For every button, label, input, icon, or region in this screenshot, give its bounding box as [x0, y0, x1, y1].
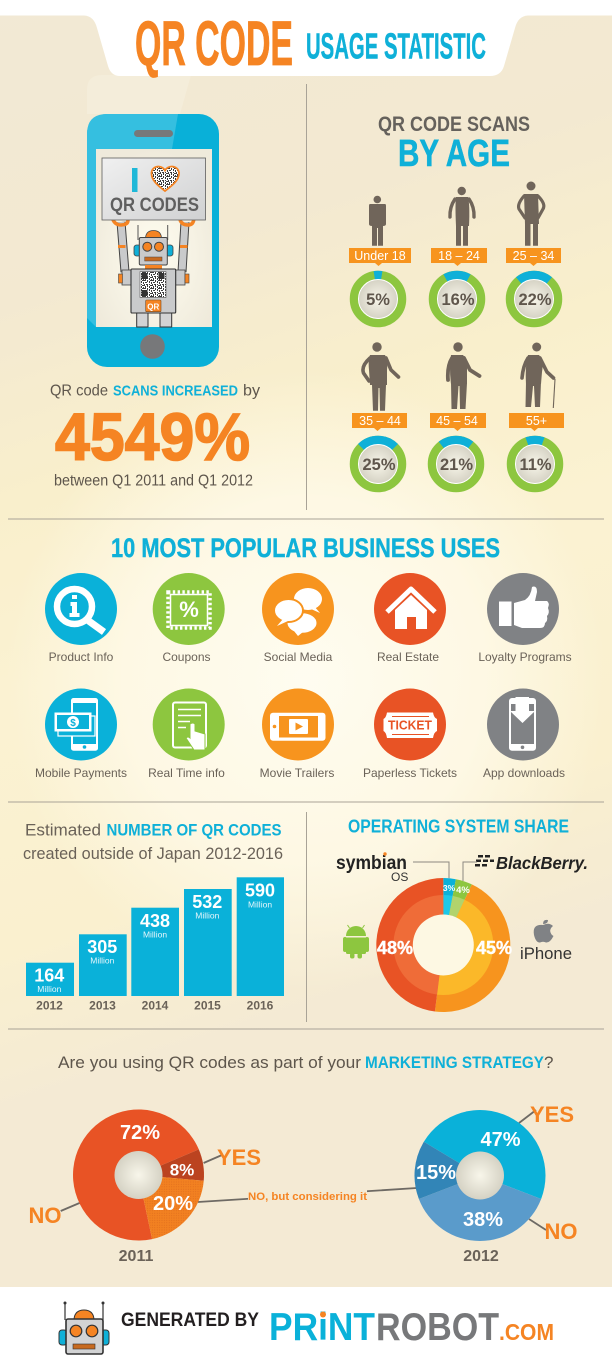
chart heading: number of QR codes: NUMBER OF QR CODES [106, 822, 282, 840]
icon: real estate: Real Estate [377, 650, 439, 664]
age label: under 18: Under 18 [354, 249, 406, 263]
segment: symbian 3% [443, 878, 456, 945]
icon: loyalty programs: Loyalty Programs [478, 650, 572, 664]
logo: symbian: symbian [336, 853, 407, 874]
stat period: between Q1 2011 and Q1 2012 [54, 472, 253, 490]
bar: 2012: Million [37, 984, 62, 994]
person: under 18 [369, 196, 386, 246]
hub [114, 1151, 162, 1199]
slice: considering 15% [414, 1142, 480, 1199]
value: 45%: 45% [476, 938, 512, 958]
callout: yes and no labels: YES [530, 1102, 574, 1127]
person: 55 plus with cane [522, 342, 555, 408]
robot arms [112, 217, 194, 285]
value: 4%: 4% [456, 885, 470, 896]
pie chart: 2012: 2012 [463, 1248, 499, 1265]
icon: loyalty programs [478, 573, 572, 664]
segment: android 48% [376, 878, 443, 1011]
phone body [87, 114, 219, 367]
pie chart: 2012: 47% [480, 1129, 521, 1151]
callout: yes and no labels [28, 1102, 578, 1244]
donut: 11% [511, 440, 559, 488]
icon: paperless tickets [363, 688, 457, 780]
icon: app downloads [483, 688, 565, 780]
robot: QR [147, 302, 160, 311]
bar: 2015: 2015 [194, 998, 221, 1012]
phone home button [140, 334, 165, 359]
bar: 2015: Million [195, 911, 220, 921]
logo: android [343, 925, 369, 958]
logo: printrobot.com: .COM [499, 1319, 554, 1345]
logo: printrobot.com: ROBOT [376, 1306, 499, 1349]
pie chart: 2011: 8% [170, 1160, 194, 1180]
bar: 2013 [79, 934, 127, 1012]
icon: real time info [148, 688, 225, 780]
slice: no 72% [73, 1109, 199, 1240]
age label: 18 to 24 [431, 248, 487, 266]
bar: 2013: 2013 [89, 998, 116, 1012]
protest sign [102, 158, 206, 220]
pie chart: 2011: 20% [153, 1193, 193, 1215]
icon: paperless tickets: TICKET [388, 718, 432, 732]
heading: scans by age: QR CODE SCANS [378, 112, 530, 136]
age label: 55 plus [509, 413, 564, 431]
icon: coupons: Coupons [162, 650, 211, 664]
bar: 2016: 2016 [247, 998, 274, 1012]
bar: 2015 [184, 889, 232, 1012]
callout: yes and no labels: YES [217, 1145, 261, 1170]
icon: mobile payments: Mobile Payments [35, 766, 127, 780]
age label: 25 to 34 [506, 248, 561, 266]
logo: printrobot.com: PRiNT [269, 1306, 375, 1349]
icon: product info [45, 573, 117, 664]
stat lead text: QR code [50, 382, 108, 400]
phone speaker [134, 130, 173, 137]
donut: 21%: 21% [440, 456, 473, 474]
donut: 11%: 11% [519, 456, 552, 474]
logo: apple iphone: iPhone [520, 944, 572, 963]
icon: real estate [374, 573, 446, 664]
logo: blackberry [463, 853, 588, 881]
stat lead text: by [243, 382, 260, 400]
connector lines [61, 1110, 546, 1230]
age label: under 18 [349, 248, 411, 266]
heading: operating system share: OPERATING SYSTEM SHARE [348, 816, 569, 836]
age label: 35 to 44: 35 – 44 [359, 414, 401, 428]
callout: yes and no labels: NO [544, 1219, 578, 1244]
heading: marketing question: Are you using QR codes as part of your [58, 1053, 361, 1072]
robot [131, 225, 176, 327]
footer [0, 1287, 612, 1368]
icon: coupons: % [179, 597, 199, 622]
panel: business use icons [35, 573, 572, 780]
heading: marketing question: ? [544, 1053, 553, 1072]
chart heading: number of QR codes: created outside of Japan 2012-2016 [23, 845, 283, 863]
stat number: 4549% [55, 400, 250, 475]
person: 25 to 34 [519, 182, 544, 246]
bar: 2013: Million [90, 956, 115, 966]
slice: yes 47% [424, 1110, 546, 1199]
pie chart: 2012 [414, 1110, 546, 1265]
logo: symbian [336, 852, 449, 884]
callout: no but considering: NO, but considering it [248, 1191, 367, 1203]
person: 35 to 44 [363, 342, 398, 411]
pie chart: 2012: 38% [463, 1209, 503, 1231]
pie chart: 2012: 15% [416, 1162, 456, 1184]
age label: 45 to 54 [430, 413, 486, 431]
donut: 21% [432, 440, 480, 488]
title banner [0, 0, 612, 79]
person: 18 to 24 [450, 187, 474, 246]
inner ring [393, 895, 493, 995]
age label: 18 to 24: 18 – 24 [438, 249, 480, 263]
bar: 2014: Million [143, 929, 167, 939]
heading: business uses: 10 MOST POPULAR BUSINESS USES [111, 533, 500, 563]
chart: operating system donut [376, 878, 512, 1012]
heading: scans by age: BY AGE [398, 133, 510, 175]
phone screen [96, 149, 212, 327]
slice: yes 8% [138, 1149, 204, 1181]
donut: 22% [510, 275, 558, 323]
logo: apple iphone [520, 920, 572, 963]
chart heading: number of QR codes [23, 822, 283, 863]
callout: yes and no labels: NO [28, 1203, 62, 1228]
bar: 2012 [26, 963, 74, 1012]
age label: 25 to 34: 25 – 34 [513, 249, 554, 263]
panel: age groups [349, 182, 564, 488]
icon: social media [262, 573, 334, 664]
pie chart: 2011 [73, 1109, 204, 1265]
value: 48%: 48% [377, 938, 413, 958]
title: QR CODE: QR CODE [135, 9, 293, 79]
icon: real time info: Real Time info [148, 766, 225, 780]
donut: 5%: 5% [366, 291, 390, 309]
chart heading: number of QR codes: Estimated [25, 822, 101, 840]
segment: iphone 45% [435, 884, 510, 1012]
bar: 2014: 2014 [142, 998, 169, 1012]
donut: 25%: 25% [362, 456, 396, 474]
bar: 2013: 305 [87, 937, 117, 957]
bar: 2016: Million [248, 899, 272, 909]
icon: app downloads: App downloads [483, 766, 565, 780]
heading: scans by age [378, 112, 530, 175]
bar: 2016 [237, 877, 284, 1012]
bar: 2014 [131, 908, 179, 1012]
stat: scans increased [50, 382, 260, 490]
age label: 55 plus: 55+ [526, 414, 547, 428]
protest sign: QR CODES [110, 195, 199, 216]
pie chart: 2011: 2011 [119, 1248, 153, 1265]
icon: social media: Social Media [264, 650, 333, 664]
slice: no 38% [419, 1176, 541, 1241]
panel: phone with robot [87, 114, 219, 367]
text: generated by: GENERATED BY [121, 1310, 259, 1331]
heading: marketing question [58, 1053, 553, 1072]
bar: 2014: 438 [140, 911, 170, 931]
age label: 45 to 54: 45 – 54 [436, 414, 478, 428]
icon: coupons [153, 573, 225, 664]
hub [456, 1152, 504, 1200]
bar: 2015: 532 [192, 892, 222, 912]
icon: product info: Product Info [49, 650, 114, 664]
donut: 5% [354, 275, 402, 323]
icon: paperless tickets: Paperless Tickets [363, 766, 457, 780]
slice: considering 20% [138, 1175, 204, 1239]
bar: 2012: 164 [34, 966, 64, 986]
bar chart [26, 877, 284, 1012]
icon: movie trailers [260, 688, 334, 780]
icon: movie trailers: Movie Trailers [260, 766, 334, 780]
bar: 2012: 2012 [36, 998, 63, 1012]
bar: 2016: 590 [245, 880, 275, 900]
age label: 35 to 44 [352, 413, 407, 431]
icon: mobile payments [35, 688, 127, 780]
stat lead text: SCANS INCREASED [113, 382, 238, 400]
person: 45 to 54 [448, 342, 480, 409]
heading: marketing question: MARKETING STRATEGY [365, 1054, 544, 1072]
segment: blackberry 4% [443, 879, 472, 945]
icon: robot head [59, 1302, 109, 1354]
stat lead text [50, 382, 260, 400]
donut: 25% [354, 440, 402, 488]
logo: printrobot.com [269, 1306, 554, 1349]
donut: 16%: 16% [441, 291, 475, 309]
value: 3%: 3% [443, 883, 456, 893]
donut: 22%: 22% [518, 291, 552, 309]
donut: 16% [433, 275, 481, 323]
pie chart: 2011: 72% [120, 1122, 160, 1144]
logo: symbian: OS [391, 870, 408, 884]
logo: blackberry: BlackBerry. [496, 853, 588, 873]
icon: mobile payments: $ [70, 718, 76, 729]
